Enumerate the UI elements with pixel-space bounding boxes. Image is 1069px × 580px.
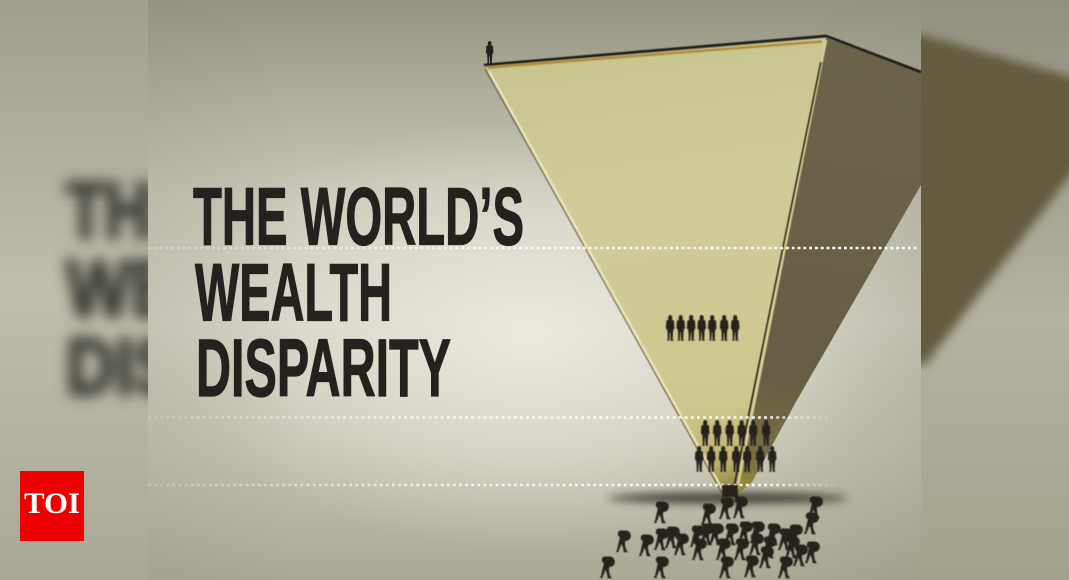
floor shadow bbox=[608, 492, 848, 504]
title: THE WORLD’S bbox=[193, 172, 524, 262]
inverted pyramid bbox=[484, 36, 921, 497]
pyramid gold front face bbox=[486, 38, 826, 497]
pyramid edge highlights bbox=[484, 36, 921, 493]
lower row of people at pyramid tip bbox=[695, 446, 776, 472]
left blurred panel: DISPARITY bbox=[66, 322, 426, 411]
dotted line lower bbox=[148, 484, 838, 486]
title bbox=[193, 172, 524, 414]
upper row of people at pyramid tip bbox=[701, 420, 770, 446]
title: WEALTH bbox=[195, 248, 392, 338]
left blurred panel bbox=[0, 0, 148, 580]
pyramid dark side face bbox=[735, 38, 921, 497]
centre background panel bbox=[148, 0, 921, 580]
crowd carrying the pyramid bbox=[600, 485, 823, 578]
right blurred panel bbox=[905, 0, 1069, 580]
left blurred panel: THE WORLD'S bbox=[66, 166, 506, 255]
dotted line upper bbox=[148, 247, 918, 249]
group of seven on pyramid bbox=[666, 315, 740, 341]
left blurred panel: WEALTH bbox=[66, 244, 356, 333]
TOI logo: TOI bbox=[24, 487, 80, 520]
top figure: the richest person bbox=[486, 41, 493, 64]
TOI logo bbox=[20, 471, 84, 541]
dotted line middle bbox=[148, 416, 830, 419]
title: DISPARITY bbox=[196, 323, 451, 414]
